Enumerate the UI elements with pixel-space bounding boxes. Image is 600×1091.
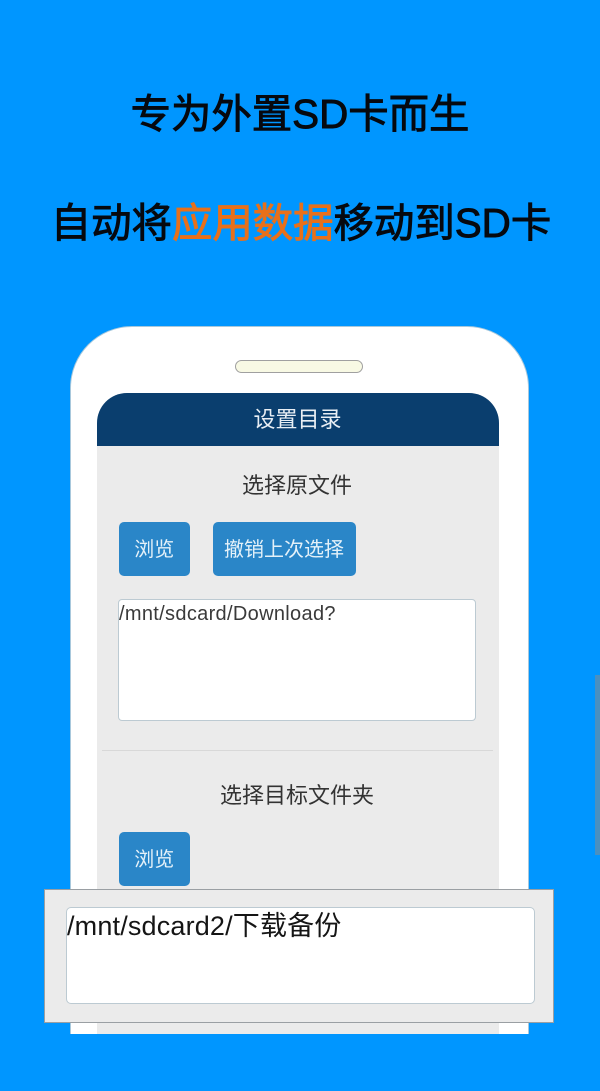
app screen panel [96, 392, 498, 1034]
source path text area [118, 599, 476, 721]
button: browse target: 浏览 [134, 849, 174, 871]
label: select source: 选择原文件 [242, 473, 352, 498]
target path text area: /mnt/sdcard2/下载备份 [67, 910, 341, 940]
button: undo last selection [212, 522, 356, 576]
source path text area: /mnt/sdcard/Download? [119, 603, 336, 625]
button: browse source: 浏览 [134, 539, 174, 561]
button: undo last selection: 撤销上次选择 [224, 539, 344, 561]
heading line 2: 自动将应用数据移动到SD卡 [51, 200, 551, 246]
button: browse source [118, 522, 190, 576]
target path text area [66, 906, 535, 1004]
enlarged target path callout [44, 889, 554, 1023]
screen header [96, 392, 498, 446]
heading line 1: 专为外置SD卡而生 [131, 91, 469, 137]
button: browse target [118, 832, 190, 886]
speaker [234, 360, 362, 372]
label: select target folder: 选择目标文件夹 [220, 783, 374, 808]
screen header: 设置目录 [253, 406, 342, 432]
scrollbar [595, 675, 600, 855]
phone mockup [70, 326, 528, 1034]
